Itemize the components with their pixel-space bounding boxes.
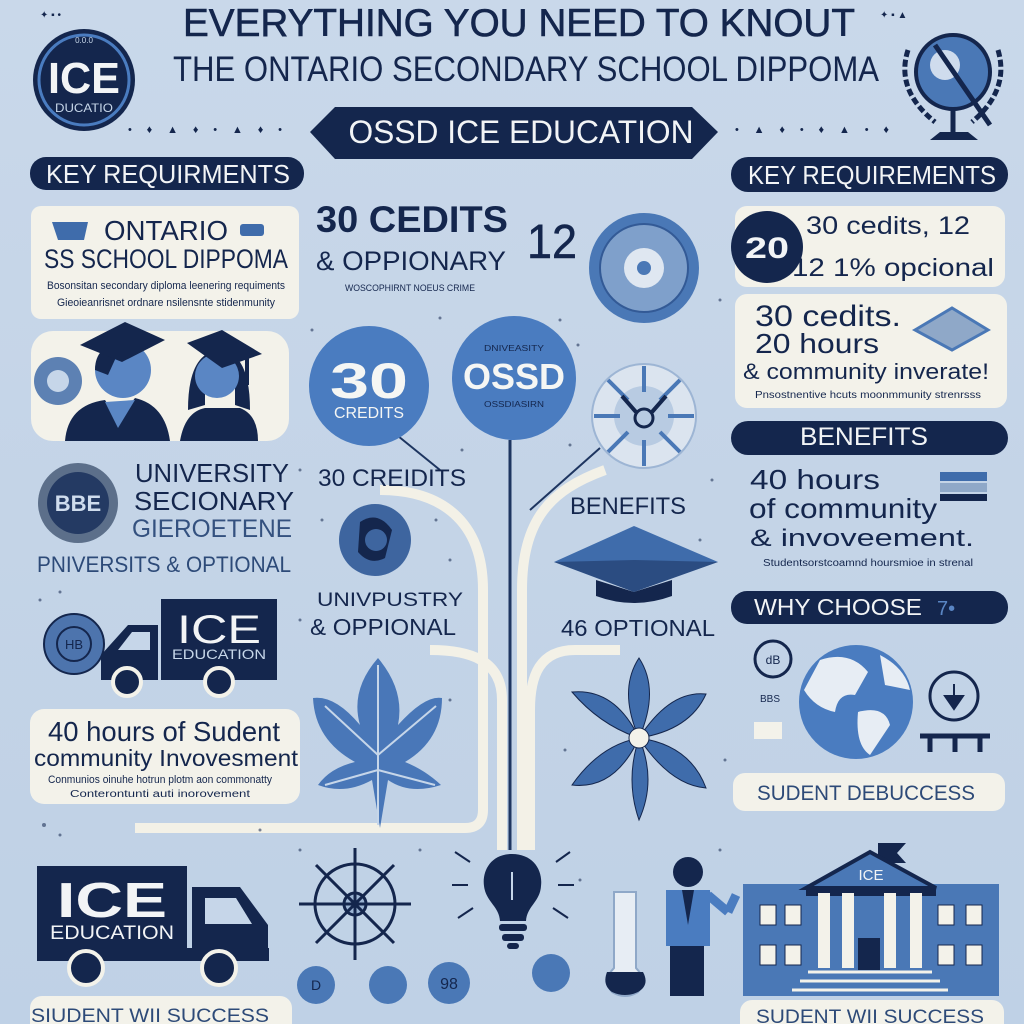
- badge: OSSD: [452, 316, 576, 440]
- text: 30 credits and optionary: 30 CEDITS: [316, 199, 508, 240]
- text: benefits center: BENEFITS: [570, 493, 686, 520]
- icon: globe: [799, 645, 913, 759]
- panel: Ontario school diploma: ONTARIO: [104, 215, 228, 246]
- badge: OSSD: OSSDIASIRN: [484, 400, 544, 409]
- heading: key requirements left: KEY REQUIRMENTS: [46, 159, 290, 189]
- text: 30 credits label: 30 CREIDITS: [318, 465, 466, 492]
- icon: globe with laurel: [905, 35, 1001, 140]
- icon: ICE education truck large: ICE: [57, 874, 167, 928]
- icon: person presenting: [666, 857, 736, 996]
- panel: graduates illustration: [31, 322, 289, 441]
- number: 12: 12: [527, 216, 577, 269]
- panel: 40 hours of student community involvement: Conterontunti auti inorovement: [70, 789, 250, 800]
- banner: OSSD ICE Education: OSSD ICE EDUCATION: [348, 114, 694, 150]
- text: 30 credits and optionary: [316, 199, 508, 293]
- text block: 40 hours of community: 40 hours: [750, 464, 880, 495]
- tree connector lines: [135, 436, 620, 850]
- panel: 40 hours of student community involvement: 40 hours of Sudent: [48, 716, 280, 747]
- panel: student success bottom right: [740, 1000, 1004, 1024]
- icon: ICE school building: [743, 843, 999, 996]
- icon: ICE education truck small: EDUCATION: [172, 646, 266, 662]
- text block: university secondary: GIEROETENE: [132, 515, 292, 543]
- icon: maple leaf: [313, 658, 442, 828]
- heading: why choose: 7•: [937, 598, 955, 620]
- text block: university secondary: PNIVERSITS & OPTIONAL: [37, 552, 291, 577]
- text: university and optional: UNIVPUSTRY: [317, 590, 463, 611]
- icon: test tube flask: [605, 892, 646, 996]
- panel: 30 credits right: 20: [745, 232, 789, 265]
- panel: 30 credits right: 30 cedits, 12: [806, 212, 970, 240]
- icon: blue medallion: [589, 213, 699, 323]
- icon: small emblems beside globe: BBS: [760, 694, 780, 705]
- badge: OSSD: OSSD: [463, 356, 565, 397]
- text block: 40 hours of community: of community: [749, 493, 937, 524]
- panel: 40 hours of student community involvement: [30, 709, 300, 804]
- icon: ICE education truck small: HB: [65, 637, 83, 652]
- title: [173, 2, 880, 89]
- panel: 30 credits 20 hours: Pnsostnentive hcuts moonmmunity strenrsss: [755, 390, 981, 401]
- icon: snowflake of leaves: [572, 658, 706, 820]
- panel: 30 credits 20 hours: [735, 294, 1007, 408]
- icon: ICE education truck small: [44, 599, 277, 696]
- icon: small round badges: [297, 954, 570, 1004]
- text: 30 credits and optionary: & OPPIONARY: [316, 246, 506, 276]
- panel: 30 credits 20 hours: 20 hours: [755, 328, 879, 359]
- panel: student success right: [733, 773, 1005, 811]
- scattered specks: [38, 298, 726, 882]
- text: university and optional: & OPPIONAL: [310, 614, 456, 640]
- text block: 40 hours of community: [749, 464, 987, 569]
- heading: key requirements right: KEY REQUIREMENTS: [748, 160, 996, 190]
- panel: 30 credits 20 hours: & community inverate!: [743, 359, 989, 384]
- decorative small icon rows: ✦ ▪ ▲: [880, 10, 907, 21]
- icon: small round badges: 98: [440, 976, 458, 993]
- heading: benefits right: BENEFITS: [800, 423, 928, 451]
- text block: university secondary: UNIVERSITY: [135, 458, 289, 488]
- icon: ICE education truck large: [37, 866, 269, 985]
- badge: 30 credits: [309, 326, 429, 446]
- title: THE ONTARIO SECONDARY SCHOOL DIPPOMA: [173, 50, 880, 89]
- text: university and optional: [310, 590, 463, 640]
- title: EVERYTHING YOU NEED TO KNOUT: [183, 2, 855, 45]
- icon: ICE school building: ICE: [858, 867, 884, 884]
- panel: Ontario school diploma: Gieoieanrisnet ordnare nsilensnte stidenmunity: [57, 297, 275, 309]
- panel: Ontario school diploma: Bosonsitan secondary diploma leenering requiments: [47, 280, 285, 292]
- icon: graduation cap: [554, 526, 718, 603]
- icon: ICE Education logo badge: DUCATIO: [55, 101, 113, 115]
- panel: 30 credits right: 12 1% opcional: [792, 254, 994, 282]
- panel: Ontario school diploma: [31, 206, 299, 319]
- icon: ICE Education logo badge: ICE: [48, 54, 120, 103]
- text block: 40 hours of community: Studentsorstcoamnd hoursmioe in strenal: [763, 558, 973, 569]
- heading: why choose: WHY CHOOSE: [754, 594, 922, 620]
- icon: small emblems beside globe: [754, 641, 990, 752]
- icon: ICE Education logo badge: [33, 29, 135, 131]
- badge: 30 credits: CREDITS: [334, 405, 404, 422]
- icon: small emblems beside globe: dB: [766, 653, 780, 667]
- badge: 30 credits: 30: [330, 353, 408, 409]
- decorative small icon rows: • ▲ ♦ • ♦ ▲ • ♦: [735, 124, 895, 136]
- text: 30 credits and optionary: WOSCOPHIRNT NOEUS CRIME: [345, 283, 475, 293]
- decorative small icon rows: ✦ ▪ •: [40, 10, 61, 21]
- panel: Ontario school diploma: SS SCHOOL DIPPOMA: [44, 244, 288, 274]
- text: 46 optional: 46 OPTIONAL: [561, 615, 715, 641]
- text block: university secondary: [37, 458, 294, 577]
- decorative small icon rows: • ♦ ▲ ♦ • ▲ ♦ •: [128, 124, 288, 136]
- panel: student success right: SUDENT DEBUCCESS: [757, 782, 975, 805]
- panel: 40 hours of student community involvement: community Invovesment: [34, 745, 299, 771]
- heading: why choose: [731, 591, 1008, 624]
- heading: benefits right: [731, 421, 1008, 455]
- text block: university secondary: SECIONARY: [134, 486, 294, 516]
- icon: ICE education truck large: EDUCATION: [50, 923, 174, 944]
- text block: university secondary: BBE: [55, 491, 101, 516]
- icon: lightbulb: [452, 852, 574, 949]
- badge: OSSD: DNIVEASITY: [484, 344, 545, 353]
- icon: small round badges: D: [311, 977, 321, 993]
- panel: 40 hours of student community involvement: Conmunios oinuhe hotrun plotm aon commonatty: [48, 774, 272, 786]
- text block: 40 hours of community: & invoveement.: [750, 525, 974, 552]
- icon: ICE education truck small: ICE: [177, 608, 261, 652]
- icon: ship wheel: [299, 848, 411, 960]
- banner: OSSD ICE Education: [310, 107, 718, 159]
- decorative small icon rows: [40, 10, 907, 136]
- icon: compass medallion: [592, 364, 696, 468]
- panel: 30 credits 20 hours: 30 cedits.: [755, 300, 901, 333]
- panel: student success bottom left: [30, 996, 292, 1024]
- panel: 30 credits right: [731, 206, 1005, 287]
- icon: round emblem: [339, 504, 411, 576]
- icon: ICE Education logo badge: 0.0.0: [75, 36, 93, 45]
